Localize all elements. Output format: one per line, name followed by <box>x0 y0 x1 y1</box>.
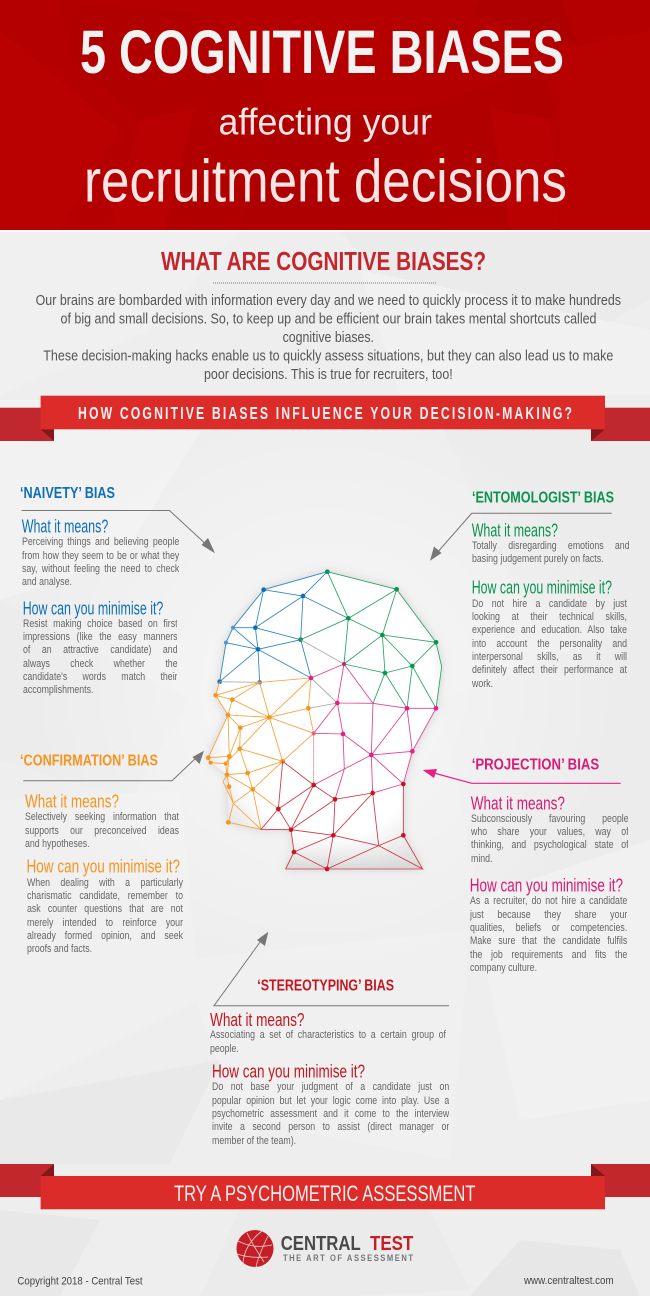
title: affecting your <box>218 101 432 142</box>
heading: ‘CONFIRMATION’ BIAS <box>20 753 158 770</box>
how can you minimise it: work. <box>472 678 493 690</box>
what it means: and analyse. <box>22 576 72 588</box>
how can you minimise it: ask counter questions that are not <box>26 903 182 915</box>
what it means: who share your values, way of <box>471 826 628 838</box>
how can you minimise it: company culture. <box>470 962 537 974</box>
how can you minimise it: How can you minimise it? <box>26 856 180 876</box>
how can you minimise it: invite a second person to assist (direct manager or <box>212 1121 449 1133</box>
how can you minimise it: experience and education. Also take <box>472 624 627 636</box>
ribbon: how cognitive biases influence <box>0 396 650 441</box>
title <box>80 18 567 215</box>
how can you minimise it: interpersonal skills, as it will <box>472 651 627 663</box>
what it means <box>210 1010 446 1057</box>
pink network <box>309 662 438 799</box>
what it means: basing judgement purely on facts. <box>472 553 603 565</box>
blue network <box>217 572 348 685</box>
heading: ‘NAIVETY’ BIAS <box>20 485 115 502</box>
how can you minimise it: How can you minimise it? <box>212 1062 365 1082</box>
what it means: What it means? <box>472 520 558 540</box>
arrow <box>430 513 612 561</box>
what it means: say, without feeling the need to check <box>22 563 179 575</box>
title: recruitment decisions <box>84 148 567 215</box>
how can you minimise it: candidate's words match their <box>23 671 177 683</box>
ribbon: try a psychometric assessment: TRY A PSYCHOMETRIC ASSESSMENT <box>174 1181 476 1206</box>
green network <box>298 569 442 708</box>
arrow <box>214 932 449 1006</box>
what it means: What it means? <box>471 794 565 814</box>
red network <box>261 733 423 871</box>
copyright: Copyright 2018 - Central Test <box>17 1276 143 1288</box>
how can you minimise it: Resist making choice based on first <box>23 618 177 630</box>
heading: what are cognitive biases: WHAT ARE COGNITIVE BIASES? <box>161 246 486 276</box>
ribbon: try a psychometric assessment <box>0 1164 650 1209</box>
how can you minimise it: of an attractive candidate) and <box>23 644 177 656</box>
website: www.centraltest.com <box>523 1275 614 1287</box>
panel: naivety bias <box>20 485 215 700</box>
how can you minimise it: popular opinion but let your logic come into play. Use a <box>212 1095 449 1107</box>
how can you minimise it <box>26 856 182 959</box>
how can you minimise it: looking at their technical skills, <box>472 611 627 623</box>
how can you minimise it: into account the personality and <box>472 638 627 650</box>
icon: globe <box>236 1230 274 1267</box>
what it means: What it means? <box>210 1010 304 1030</box>
intro paragraph <box>36 293 621 383</box>
how can you minimise it: Do not base your judgment of a candidate just on <box>212 1081 449 1093</box>
how can you minimise it: merely intended to reinforce your <box>26 917 182 929</box>
what it means: mind. <box>471 853 492 865</box>
panel: stereotyping bias <box>210 932 449 1149</box>
arrow <box>423 769 621 783</box>
what it means: from how they seem to be or what they <box>22 550 179 562</box>
logo: central test: THE ART OF ASSESSMENT <box>283 1252 414 1263</box>
how can you minimise it <box>472 578 627 693</box>
panel: entomologist bias <box>430 490 629 693</box>
intro paragraph: poor decisions. This is true for recruiters, too! <box>204 367 453 383</box>
how can you minimise it <box>212 1062 449 1149</box>
how can you minimise it: charismatic candidate, remember to <box>26 890 182 902</box>
how can you minimise it: impressions (like the easy manners <box>23 631 177 643</box>
logo: central test <box>236 1230 414 1267</box>
what it means: Totally disregarding emotions and <box>472 540 629 552</box>
header banner background <box>0 0 650 232</box>
how can you minimise it: accomplishments. <box>23 684 93 696</box>
how can you minimise it: When dealing with a particularly <box>26 877 182 889</box>
what it means <box>472 520 629 568</box>
how can you minimise it: the job requirements and fits the <box>470 949 627 961</box>
what it means: What it means? <box>25 792 119 812</box>
what it means: What it means? <box>22 517 108 537</box>
how can you minimise it: Do not hire a candidate by just <box>472 598 627 610</box>
head network illustration <box>206 569 442 871</box>
ribbon: how cognitive biases influence: HOW COGNITIVE BIASES INFLUENCE YOUR DECISION-MAKING? <box>78 404 572 424</box>
what it means: Associating a set of characteristics to a certain group of <box>210 1029 446 1041</box>
what it means: Selectively seeking information that <box>25 811 179 823</box>
how can you minimise it: member of the team). <box>212 1135 296 1147</box>
how can you minimise it: definitely affect their performance at <box>472 664 627 676</box>
heading: ‘ENTOMOLOGIST’ BIAS <box>472 490 614 507</box>
arrow <box>22 510 215 553</box>
how can you minimise it: always check whether the <box>23 658 177 670</box>
how can you minimise it: As a recruiter, do not hire a candidate <box>470 895 627 907</box>
how can you minimise it: psychometric assessment and it come to the interview <box>212 1108 449 1120</box>
how can you minimise it: just because they share your <box>470 909 627 921</box>
head silhouette <box>208 572 442 869</box>
what it means <box>25 792 179 853</box>
logo: central test: CENTRAL <box>281 1233 361 1255</box>
heading: ‘PROJECTION’ BIAS <box>472 757 599 774</box>
what it means: Subconsciously favouring people <box>471 813 628 825</box>
panel: projection bias <box>423 757 628 977</box>
what it means <box>471 794 628 868</box>
arrow <box>23 751 204 781</box>
how can you minimise it: How can you minimise it? <box>23 598 163 618</box>
what it means: thinking, and psychological state of <box>471 839 628 851</box>
how can you minimise it <box>470 876 627 977</box>
what it means: and hypotheses. <box>25 838 90 850</box>
what it means: supports our preconceived ideas <box>25 825 179 837</box>
what it means <box>22 517 179 591</box>
how can you minimise it <box>23 598 177 700</box>
what it means: people. <box>210 1043 239 1055</box>
orange network <box>206 678 314 829</box>
what it means: Perceiving things and believing people <box>22 536 179 548</box>
intro paragraph: cognitive biases. <box>283 330 374 346</box>
how can you minimise it: proofs and facts. <box>26 943 92 955</box>
how can you minimise it: qualities, beliefs or competencies. <box>470 922 627 934</box>
how can you minimise it: Make sure that the candidate fulfils <box>470 935 627 947</box>
panel: confirmation bias <box>20 751 204 959</box>
heading: ‘STEREOTYPING’ BIAS <box>257 978 394 995</box>
logo: central test: TEST <box>370 1233 413 1255</box>
how can you minimise it: already formed opinion, and seek <box>26 930 182 942</box>
